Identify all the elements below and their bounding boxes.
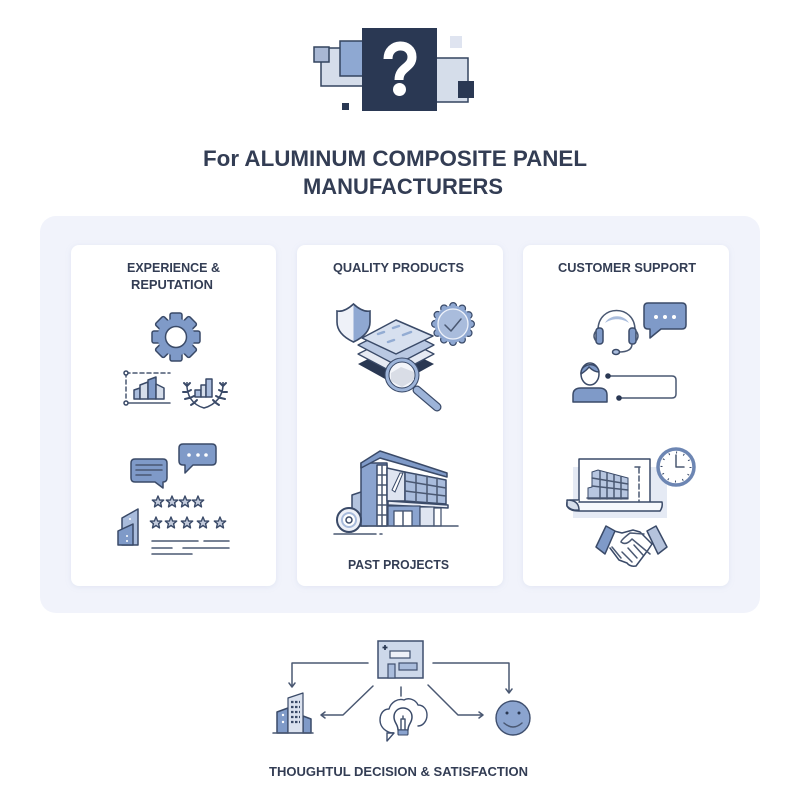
heading: experience and reputation: EXPERIENCE & — [127, 260, 220, 275]
icon: floor plan — [378, 641, 423, 678]
icon: small building — [118, 509, 138, 545]
panel: customer support — [523, 245, 729, 586]
icon: idea light bulb in cloud — [380, 699, 427, 741]
arrow: lower left — [321, 686, 373, 718]
icon: gear — [152, 313, 200, 361]
icon: building with dimension lines — [124, 371, 170, 405]
review text lines — [152, 541, 229, 554]
title — [203, 146, 587, 199]
icon: chat bubble — [644, 303, 686, 338]
icon: clock — [658, 448, 694, 486]
panel: experience and reputation — [71, 245, 276, 586]
heading: past projects: PAST PROJECTS — [348, 557, 449, 572]
icon: blueprint — [567, 459, 667, 518]
icon: panel layers — [358, 320, 434, 385]
decision flow diagram — [273, 641, 530, 741]
icon: headset — [594, 310, 638, 354]
heading: customer support: CUSTOMER SUPPORT — [558, 260, 696, 275]
arrow: center tick — [400, 687, 402, 696]
icon: bar chart in laurel wreath — [183, 379, 227, 408]
caption: thoughtful decision and satisfaction: THOUGHTUL DECISION & SATISFACTION — [269, 764, 528, 779]
arrow: to smiley — [433, 663, 512, 693]
title: MANUFACTURERS — [303, 174, 503, 199]
panel: main background — [40, 216, 760, 613]
icon: shield — [337, 304, 370, 342]
icon: city building — [273, 693, 313, 733]
icon: magnifying glass — [387, 360, 437, 407]
connector lines — [605, 373, 676, 401]
heading: quality products: QUALITY PRODUCTS — [333, 260, 464, 275]
panel: quality products — [297, 245, 503, 586]
icon: handshake — [596, 526, 667, 566]
icon: smiley — [496, 701, 530, 735]
icon: star ratings — [150, 496, 226, 528]
heading: experience and reputation — [127, 260, 220, 292]
icon: question mark with overlapping squares — [314, 28, 474, 111]
icon: building — [334, 451, 458, 534]
icon: person — [573, 363, 607, 402]
heading: experience and reputation: REPUTATION — [131, 277, 213, 292]
icon: speech bubble with lines — [131, 459, 167, 488]
title: For ALUMINUM COMPOSITE PANEL — [203, 146, 587, 171]
arrow: to building — [289, 663, 368, 687]
icon: speech bubble with dots — [179, 444, 216, 473]
icon: quality badge — [434, 306, 472, 342]
arrow: lower right — [428, 685, 483, 718]
